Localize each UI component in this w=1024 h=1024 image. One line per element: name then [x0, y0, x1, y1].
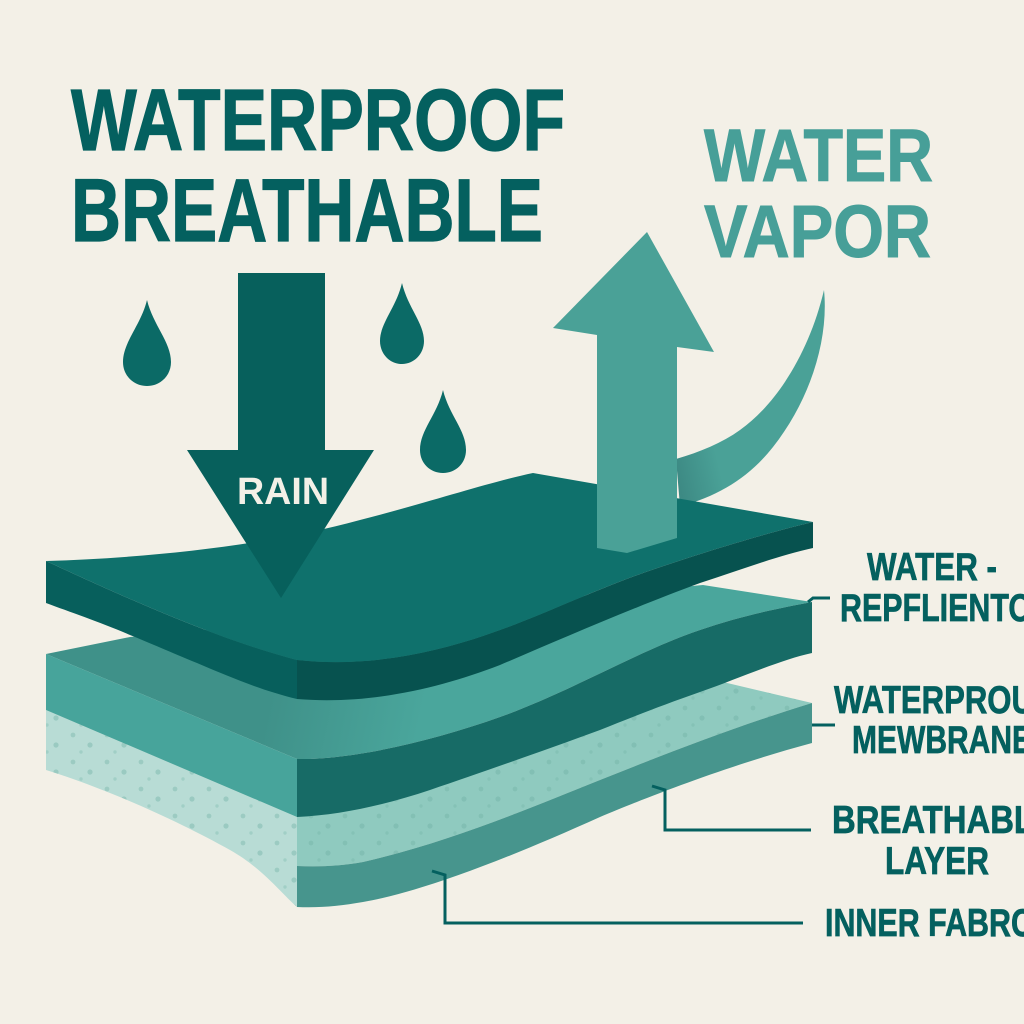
label: water-repellent: WATER - [867, 546, 997, 589]
curved vapor swoosh [676, 290, 825, 506]
icon: rain drop right [380, 283, 424, 364]
inner fabric face [297, 703, 812, 907]
label: breathable layer: LAYER [885, 840, 989, 883]
label: rain: RAIN [237, 471, 329, 513]
arrow: water vapor up [553, 232, 714, 553]
heading: water vapor: WATER [704, 114, 933, 197]
breathable top surface [297, 682, 812, 866]
left face [46, 561, 297, 699]
arrow: rain down [187, 273, 374, 598]
icon: rain drop left [123, 300, 171, 386]
membrane right face [297, 602, 812, 817]
label: breathable layer [652, 786, 1024, 883]
heading: water vapor: VAPOR [704, 190, 931, 273]
title: BREATHABLE [71, 160, 543, 260]
icon: rain drop center [420, 390, 466, 473]
label: waterproof membrane [812, 679, 1024, 762]
breathable left face [46, 710, 297, 907]
layer: waterproof membrane [46, 585, 812, 817]
title: WATERPROOF [71, 72, 565, 169]
membrane left face [46, 654, 297, 817]
top surface [46, 473, 813, 662]
label: inner fabric [432, 871, 1024, 945]
membrane top surface [46, 585, 812, 759]
label: water-repellent [808, 546, 1024, 630]
layer: water-repellent top [46, 473, 813, 700]
heading: water vapor [704, 114, 933, 273]
title [71, 72, 565, 260]
layer: inner fabric [46, 682, 812, 907]
right face [297, 522, 813, 700]
